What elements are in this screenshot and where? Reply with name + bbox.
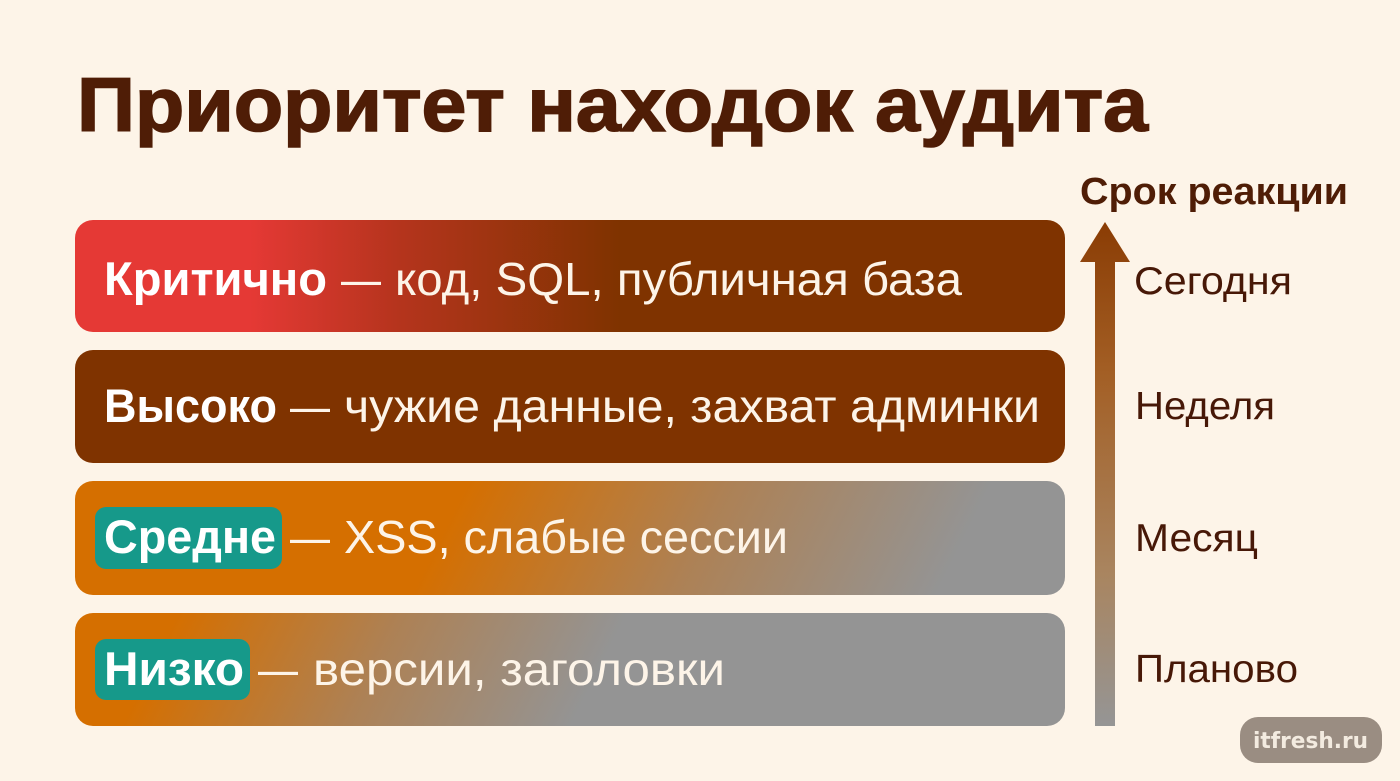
label: week: Неделя <box>1135 385 1275 428</box>
label: today: Сегодня <box>1134 260 1292 303</box>
watermark badge <box>1240 717 1382 763</box>
arrow: response urgency <box>1080 222 1130 726</box>
panel: critical priority bar <box>75 220 1065 332</box>
highlighted label: low: Низко <box>104 642 244 695</box>
description: low: — <box>258 643 298 695</box>
panel: medium priority bar <box>75 481 1065 595</box>
description: medium: — <box>290 511 330 563</box>
axis heading: Срок реакции <box>1080 171 1348 213</box>
panel: high priority bar <box>75 350 1065 463</box>
description: medium: XSS, слабые сессии <box>344 511 788 563</box>
description: high: чужие данные, захват админки <box>344 380 1040 432</box>
label: high: Высоко <box>104 379 277 432</box>
description: critical: — <box>341 253 381 305</box>
description: critical: код, SQL, публичная база <box>395 253 962 305</box>
panel: low priority bar <box>75 613 1065 726</box>
label: critical: Критично <box>104 252 327 305</box>
highlighted label: medium: Средне <box>104 510 276 563</box>
description: low: версии, заголовки <box>313 643 725 695</box>
description: high: — <box>290 380 330 432</box>
label: month: Месяц <box>1135 517 1258 560</box>
watermark badge: itfresh.ru <box>1253 729 1368 754</box>
label: planned: Планово <box>1135 648 1298 691</box>
title: Приоритет находок аудита <box>77 63 1149 148</box>
time labels <box>1134 260 1298 691</box>
